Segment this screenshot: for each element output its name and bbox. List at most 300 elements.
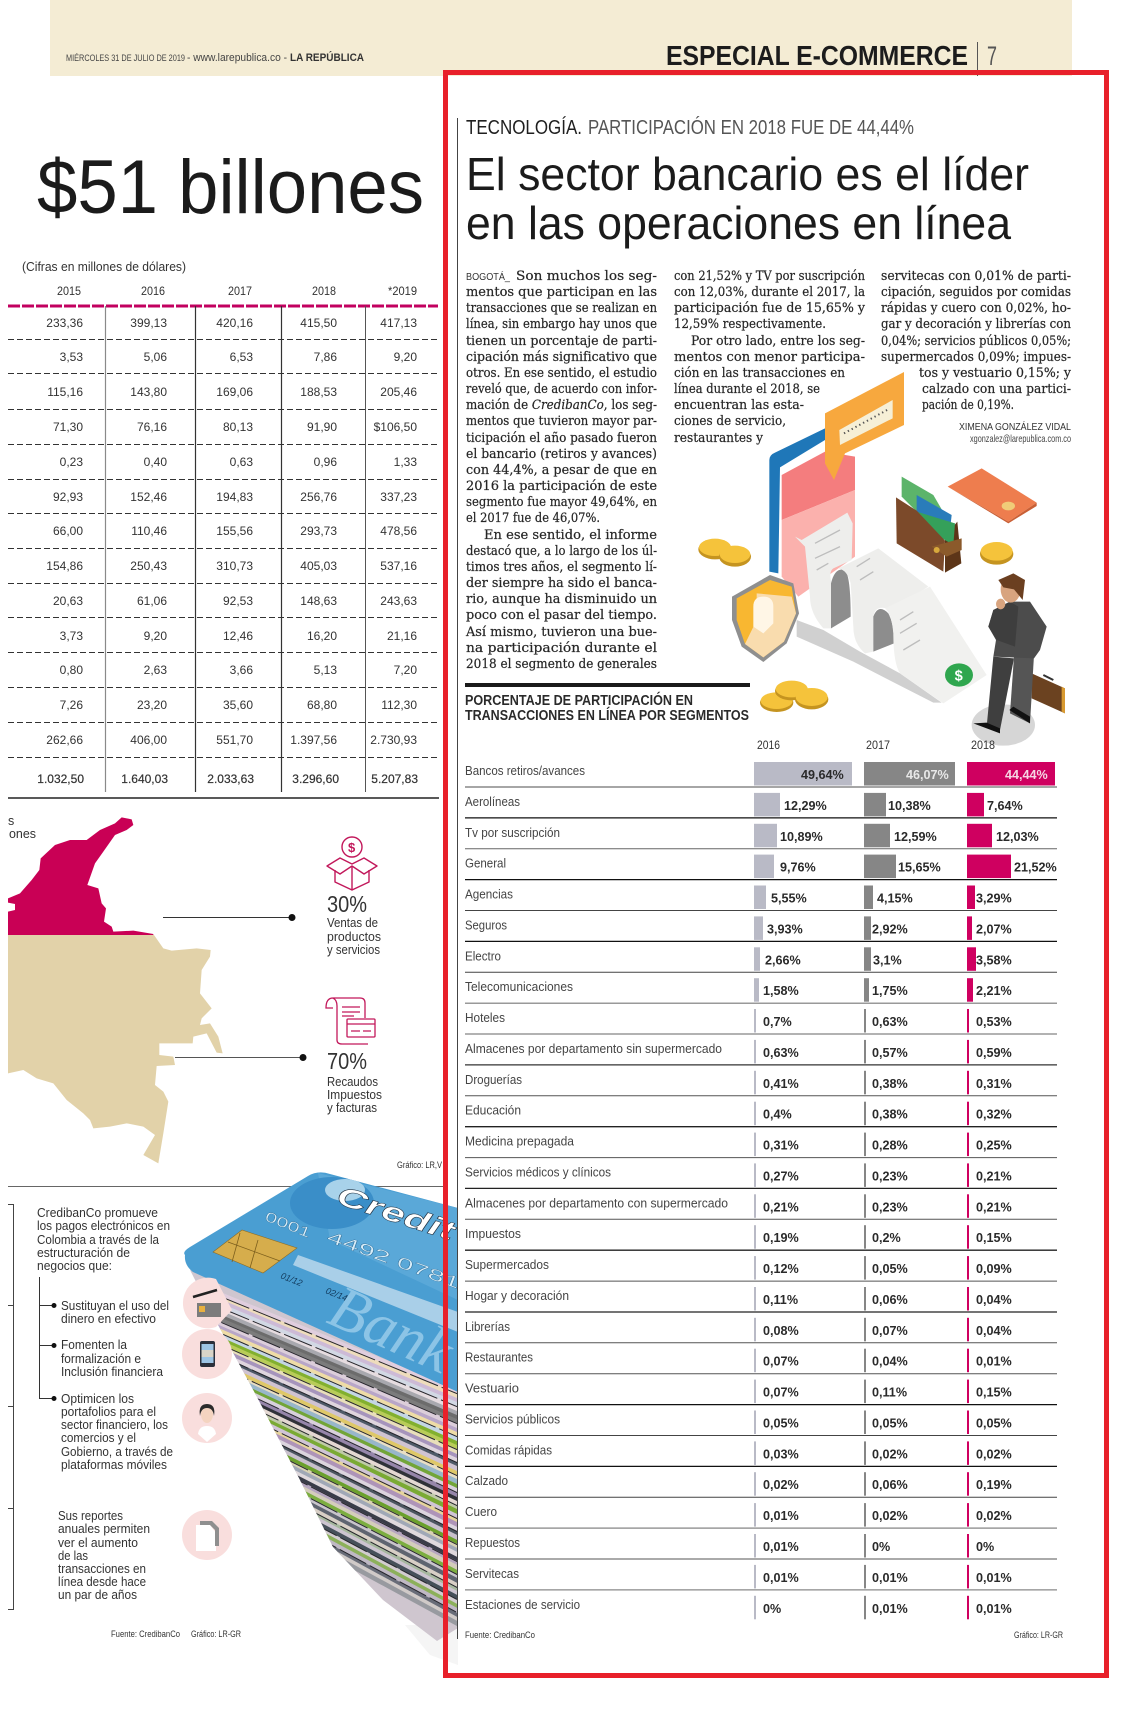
article column 1: Así mismo, tuvieron una bue-: [465, 625, 657, 640]
bullet: fomenten: Fomenten la: [61, 1338, 127, 1352]
row: Comidas rápidas: 0,02%: [976, 1447, 1012, 1461]
row: Almacenes sin supermercado: 0,63%: [763, 1046, 799, 1060]
text: annual reports: anuales permiten: [58, 1522, 150, 1536]
row: Medicina prepagada: 0,31%: [763, 1139, 799, 1153]
table values: 0,23: [60, 455, 83, 469]
stat: 30% sales: y servicios: [327, 943, 380, 957]
bottom-left intro text: los pagos electrónicos en: [37, 1219, 170, 1233]
table values: 21,16: [387, 629, 417, 643]
row: Droguerías: 0,38%: [872, 1077, 908, 1091]
row: Electro: 3,1%: [873, 953, 902, 967]
row: Servicios públicos: Servicios públicos: [465, 1412, 560, 1426]
table values: 112,30: [381, 698, 417, 712]
table values: 20,63: [53, 594, 83, 608]
connector: 30%: [163, 914, 296, 921]
table values: 262,66: [46, 733, 83, 747]
page header band: [50, 0, 1072, 76]
row: Repuestos: 0,01%: [763, 1540, 799, 1554]
row: Impuestos: 0,2%: [872, 1231, 901, 1245]
row: Electro: Electro: [465, 948, 501, 963]
row: Medicina prepagada: 0,25%: [976, 1139, 1012, 1153]
table values: 551,70: [216, 733, 253, 747]
table values: 205,46: [380, 385, 417, 399]
page header band: MIÉRCOLES 31 DE JULIO DE 2019: [66, 53, 185, 63]
table values: 417,13: [380, 316, 417, 330]
chart year headers: [757, 738, 995, 752]
row: Servicios médicos y clínicos: 0,27%: [763, 1169, 799, 1183]
row: Hogar y decoración: Hogar y decoración: [465, 1288, 569, 1303]
bullet: optimicen: [61, 1392, 173, 1472]
stat: 70% collections: 70%: [327, 1048, 367, 1074]
coins left: [698, 539, 751, 567]
row: Impuestos: Impuestos: [465, 1226, 521, 1241]
table values: 399,13: [130, 316, 167, 330]
table year headers: 2015: [57, 284, 81, 298]
article column 3: pación de 0,19%.: [922, 398, 1014, 413]
bullet: optimicen: plataformas móviles: [61, 1458, 167, 1472]
map lower region 70%: [8, 935, 223, 1163]
text: annual reports: ver el aumento: [58, 1536, 138, 1550]
row: Restaurantes: 0,07%: [763, 1355, 799, 1369]
article column 1: [465, 269, 658, 672]
map graphic credit: Gráfico: LR,V: [397, 1160, 442, 1170]
row: General: [465, 855, 1057, 880]
row: Cuero: Cuero: [465, 1504, 497, 1519]
bullet: optimicen: Gobierno, a través de: [61, 1445, 173, 1459]
table values: 415,50: [300, 316, 337, 330]
row: Agencias: Agencias: [465, 886, 513, 902]
row: Educación: Educación: [465, 1103, 521, 1118]
stack edge stripes: [180, 1260, 460, 1650]
article column 3: [881, 269, 1072, 413]
article column 1: 2016 la participación de este: [466, 479, 657, 494]
row: Calzado: Calzado: [465, 1473, 508, 1488]
row: Librerías: Librerías: [465, 1319, 510, 1334]
chart year headers: 2017: [866, 738, 890, 752]
table values: 243,63: [380, 594, 417, 608]
table values: 12,46: [223, 629, 253, 643]
row: Almacenes con supermercado: 0,23%: [872, 1200, 908, 1214]
article column 1: En ese sentido, el informe: [484, 528, 657, 543]
row: Almacenes con supermercado: Almacenes por departamento con supermercado: [465, 1195, 728, 1210]
row: Librerías: 0,04%: [976, 1324, 1012, 1338]
row: Servitecas: Servitecas: [465, 1566, 519, 1581]
fine dark card edges: [221, 1298, 457, 1612]
table values: 92,93: [53, 490, 83, 504]
row: Electro: 2,66%: [765, 953, 801, 967]
man in suit: [973, 573, 1047, 733]
row: Bancos: 49,64%: [801, 768, 844, 782]
chart year headers: 2016: [757, 738, 780, 752]
green dollar badge: $: [955, 669, 963, 685]
row: Aerolíneas: 7,64%: [987, 799, 1023, 813]
row: Impuestos: [465, 1225, 1057, 1250]
bottom-left intro text: [37, 1206, 170, 1273]
row: Servitecas: [465, 1565, 1057, 1590]
icon: person in circle: [182, 1393, 232, 1443]
row: Bancos: 46,07%: [906, 768, 949, 782]
row: Vestuario: 0,07%: [763, 1386, 799, 1400]
icon: open box with coin: $: [348, 840, 356, 855]
row: Electro: 3,58%: [976, 953, 1012, 967]
article column 1: cipación más significativo que: [466, 350, 657, 365]
icon: card in circle: [183, 1278, 232, 1328]
row: Bancos: 44,44%: [1005, 768, 1048, 782]
article column 1: timos tres años, el segmento lí-: [466, 560, 657, 575]
bottom-left intro text: estructuración de: [37, 1246, 130, 1260]
chart source line: Gráfico: LR-GR: [1014, 1630, 1063, 1640]
row: Calzado: 0,02%: [763, 1478, 799, 1492]
article column 2: ción en las transacciones en: [674, 366, 846, 381]
row: Almacenes con supermercado: 0,21%: [976, 1200, 1012, 1214]
table values: 152,46: [130, 490, 167, 504]
coins lower: [760, 681, 828, 712]
row: Restaurantes: 0,04%: [872, 1355, 908, 1369]
table values: 337,23: [380, 490, 417, 504]
orange credit card: [948, 468, 1037, 523]
row: Servicios públicos: 0,05%: [872, 1416, 908, 1430]
left source line: Fuente: CredibanCo: [111, 1629, 180, 1639]
chart title: PORCENTAJE DE PARTICIPACIÓN EN: [465, 691, 693, 709]
table values: 66,00: [53, 524, 83, 538]
row: Estaciones de servicio: 0%: [763, 1602, 781, 1616]
table values: 115,16: [47, 385, 83, 399]
table values: 233,36: [46, 316, 83, 330]
map cropped label: [8, 814, 36, 841]
table values: 3,66: [230, 663, 253, 677]
row: Estaciones de servicio: 0,01%: [872, 1602, 908, 1616]
table values: 35,60: [223, 698, 253, 712]
article column 2: restaurantes y: [674, 431, 764, 446]
table values: 5.207,83: [371, 772, 418, 786]
table values: 23,20: [137, 698, 167, 712]
table values: 143,80: [130, 385, 167, 399]
bar chart: participation by segment: [465, 762, 1057, 1619]
bullet: fomenten: Inclusión financiera: [61, 1365, 163, 1379]
row: Vestuario: Vestuario: [465, 1381, 519, 1396]
row: Agencias: [465, 886, 1057, 910]
row: Supermercados: 0,12%: [763, 1262, 799, 1276]
article column 1: línea, sin embargo hay unos que: [466, 317, 657, 332]
byline: xgonzalez@larepublica.com.co: [970, 433, 1071, 445]
article column 3: rápidas y cuero con 0,02%, ho-: [881, 301, 1071, 316]
table values: 420,16: [216, 316, 253, 330]
page header band: LA REPÚBLICA: [290, 51, 364, 64]
row: Almacenes sin supermercado: Almacenes por departamento sin supermercado: [465, 1041, 722, 1056]
card chip: [213, 1230, 297, 1273]
article column 1: poco con el pasar del tiempo.: [466, 608, 657, 623]
row: Seguros: Seguros: [465, 917, 507, 932]
green dollar badge: [945, 663, 973, 687]
row: Servicios médicos y clínicos: 0,23%: [872, 1169, 908, 1183]
table values: 405,03: [300, 559, 337, 573]
table year headers: *2019: [388, 284, 417, 298]
article column 2: con 12,03%, durante el 2017, la: [674, 285, 865, 300]
article column 1: otros. En ese sentido, el estudio: [466, 366, 657, 381]
article column 2: 12,59% respectivamente.: [674, 317, 826, 332]
row: Tv por suscripción: 12,03%: [996, 830, 1039, 844]
article column 1: segmento fue mayor 49,64%, en: [466, 495, 658, 510]
left bracket with ticks: [8, 1204, 14, 1610]
row: Vestuario: 0,11%: [872, 1386, 907, 1400]
article column 1: reveló que, de acuerdo con infor-: [466, 382, 657, 397]
row: Educación: 0,32%: [976, 1108, 1012, 1122]
map of Colombia split 30/70: [8, 814, 223, 1163]
table values: 5,06: [144, 350, 167, 364]
article column 2: línea durante el 2018, se: [674, 382, 820, 397]
row: Restaurantes: Restaurantes: [465, 1350, 533, 1365]
table values: 537,16: [380, 559, 417, 573]
row: Droguerías: Droguerías: [465, 1072, 522, 1087]
byline: [959, 420, 1071, 445]
table year headers: 2018: [312, 284, 336, 298]
row: Telecomunicaciones: Telecomunicaciones: [465, 979, 573, 994]
table values: 71,30: [53, 420, 83, 434]
row: Servicios médicos y clínicos: Servicios médicos y clínicos: [465, 1164, 611, 1179]
article column 3: tos y vestuario 0,15%; y: [919, 366, 1072, 381]
table year headers: 2017: [228, 284, 252, 298]
table year headers: 2016: [141, 284, 165, 298]
table values: 7,86: [314, 350, 337, 364]
row: Servicios médicos y clínicos: [465, 1163, 1057, 1188]
top card: [180, 1165, 465, 1395]
article column 1: el bancario (retiros y avances): [466, 447, 657, 462]
row: Agencias: 3,29%: [976, 892, 1012, 906]
article column 2: participación fue de 15,65% y: [674, 301, 866, 316]
table values: 110,46: [131, 524, 167, 538]
text: annual reports: [58, 1509, 150, 1602]
stat: 30% sales: [327, 891, 381, 957]
kicker: [466, 116, 914, 139]
table values: 256,76: [300, 490, 337, 504]
row: Telecomunicaciones: [465, 978, 1057, 1003]
table values: 2.033,63: [207, 772, 254, 786]
title: [466, 148, 1029, 249]
row: Comidas rápidas: 0,02%: [872, 1447, 908, 1461]
article column 3: gar y decoración y librerías con: [881, 317, 1072, 332]
bullet: sustituyan: dinero en efectivo: [61, 1312, 156, 1326]
stat: 70% collections: Impuestos: [327, 1088, 382, 1102]
icon: document in circle: [182, 1510, 232, 1560]
page header band: - www.larepublica.co -: [187, 52, 287, 64]
bullet: optimicen: comercios y el: [61, 1431, 136, 1445]
row: Hoteles: Hoteles: [465, 1010, 505, 1025]
briefcase: [1032, 673, 1065, 713]
row: Tv por suscripción: 12,59%: [894, 830, 937, 844]
table values: 250,43: [130, 559, 167, 573]
table values: 2.730,93: [370, 733, 417, 747]
text: annual reports: un par de años: [58, 1588, 137, 1602]
page header band: ESPECIAL E-COMMERCE: [666, 40, 968, 71]
man's ground shadow: [972, 704, 1035, 746]
stat: 30% sales: Ventas de: [327, 916, 378, 930]
table values: 1,33: [394, 455, 417, 469]
row: Repuestos: 0%: [872, 1540, 890, 1554]
photo: stack of credit cards: [180, 1165, 465, 1665]
row: Supermercados: 0,09%: [976, 1262, 1012, 1276]
bullet: sustituyan: Sustituyan el uso del: [61, 1299, 169, 1313]
row: Tv por suscripción: 10,89%: [780, 830, 823, 844]
row: Calzado: 0,19%: [976, 1478, 1012, 1492]
row: Hoteles: 0,7%: [763, 1015, 792, 1029]
row: Aerolíneas: Aerolíneas: [465, 794, 520, 809]
phone screen: [782, 452, 855, 597]
icon: open box with coin: [327, 837, 377, 890]
table values: 406,00: [130, 733, 167, 747]
row: Comidas rápidas: 0,03%: [763, 1447, 799, 1461]
row: Estaciones de servicio: Estaciones de servicio: [465, 1597, 580, 1612]
article column 1: na participación durante el: [466, 641, 657, 656]
article column 1: el 2017 fue de 46,07%.: [466, 511, 600, 526]
table values: 293,73: [300, 524, 337, 538]
table year headers: [57, 284, 417, 298]
card text: Credit: [333, 1180, 460, 1247]
row: Hoteles: 0,63%: [872, 1015, 908, 1029]
row: Telecomunicaciones: 1,58%: [763, 984, 799, 998]
row: Almacenes con supermercado: 0,21%: [763, 1200, 799, 1214]
stat: 30% sales: 30%: [327, 891, 367, 917]
table values: 0,96: [314, 455, 337, 469]
article column 2: con 21,52% y TV por suscripción: [674, 269, 866, 284]
row: Seguros: 3,93%: [767, 922, 803, 936]
row: Aerolíneas: 12,29%: [784, 799, 827, 813]
row: General: 15,65%: [898, 861, 941, 875]
article column 2: [674, 269, 866, 446]
article column 1: mentos que participan en las: [466, 285, 657, 300]
left source line: Gráfico: LR-GR: [191, 1629, 241, 1639]
stat: 70% collections: Recaudos: [327, 1075, 378, 1089]
connector: 70%: [175, 1054, 306, 1061]
kicker: TECNOLOGÍA.: [466, 116, 582, 139]
row: Seguros: [465, 916, 1057, 941]
phone frame: [769, 428, 825, 573]
bullet: sustituyan: [61, 1299, 169, 1326]
left headline: $51 billones: $51 billones: [37, 145, 424, 230]
table values: 0,40: [144, 455, 167, 469]
table values: [37, 316, 418, 786]
top card: 01/12: [279, 1271, 304, 1288]
tree connector with bullets: [40, 1277, 56, 1401]
row: Tv por suscripción: [465, 824, 1057, 849]
text: annual reports: línea desde hace: [58, 1575, 146, 1589]
left table of yearly figures: [8, 260, 439, 798]
table values: 194,83: [216, 490, 253, 504]
table values: 9,20: [144, 629, 167, 643]
row: Supermercados: [465, 1256, 1057, 1281]
illustration: mobile payments: [698, 372, 1065, 746]
row: Tv por suscripción: Tv por suscripción: [465, 825, 560, 840]
table values: 3.296,60: [292, 772, 339, 786]
row: Calzado: 0,06%: [872, 1478, 908, 1492]
table values: 1.032,50: [37, 772, 84, 786]
chart source line: [465, 1630, 1063, 1640]
row: Aerolíneas: [465, 793, 1057, 818]
chart title rule: [465, 683, 750, 687]
article column 1: Son muchos los seg-: [516, 269, 657, 284]
text: annual reports: transacciones en: [58, 1562, 146, 1576]
row: Servicios médicos y clínicos: 0,21%: [976, 1169, 1012, 1183]
table values: 7,20: [394, 663, 417, 677]
table values: 6,53: [230, 350, 253, 364]
article column 1: destacó que, a lo largo de los úl-: [466, 544, 657, 559]
bullet: fomenten: [61, 1338, 163, 1379]
left source line: [111, 1629, 241, 1639]
bottom-left intro text: CredibanCo promueve: [37, 1206, 158, 1220]
row: Librerías: 0,08%: [763, 1324, 799, 1338]
text: annual reports: de las: [58, 1549, 88, 1563]
article column 1: rio, aunque ha disminuido un: [466, 592, 658, 607]
row: Vestuario: 0,15%: [976, 1386, 1012, 1400]
title: El sector bancario es el líder: [466, 148, 1029, 200]
table values: 61,06: [137, 594, 167, 608]
table values: 188,53: [300, 385, 337, 399]
article column 1: 2018 el segmento de generales: [466, 657, 657, 672]
table values: 7,26: [60, 698, 83, 712]
table values: 3,53: [60, 350, 83, 364]
stat: 30% sales: productos: [327, 930, 381, 944]
article column 3: supermercados 0,09%; impues-: [881, 350, 1071, 365]
row: Medicina prepagada: Medicina prepagada: [465, 1134, 575, 1149]
row: General: General: [465, 856, 506, 871]
row: Supermercados: 0,05%: [872, 1262, 908, 1276]
wallet: [896, 477, 962, 573]
row: Servicios públicos: 0,05%: [976, 1416, 1012, 1430]
article column 1: transacciones que se realizan en: [466, 301, 658, 316]
chart title: TRANSACCIONES EN LÍNEA POR SEGMENTOS: [465, 707, 749, 724]
bullet: optimicen: sector financiero, los: [61, 1418, 168, 1432]
bullet: optimicen: Optimicen los: [61, 1392, 134, 1406]
row: Bancos: [465, 762, 1057, 787]
table values: 310,73: [216, 559, 253, 573]
stat: 70% collections: [327, 1048, 382, 1115]
stat: 70% collections: y facturas: [327, 1101, 377, 1115]
row: Droguerías: [465, 1071, 1057, 1096]
row: Seguros: 2,92%: [872, 922, 908, 936]
row: Cuero: [465, 1503, 1057, 1528]
row: Vestuario: [465, 1380, 1057, 1405]
article column 1: mentos que tuvieron mayor par-: [466, 414, 657, 429]
table values: 2,63: [144, 663, 167, 677]
page header band: 7: [987, 41, 997, 71]
article column 2: ciones de servicio,: [674, 414, 786, 429]
table values: 9,20: [394, 350, 417, 364]
row: Telecomunicaciones: 1,75%: [872, 984, 908, 998]
icon: phone in circle: [182, 1329, 232, 1379]
article column 3: servitecas con 0,01% de parti-: [881, 269, 1071, 284]
row: Librerías: [465, 1318, 1057, 1343]
row: Hoteles: [465, 1009, 1057, 1034]
article column 3: calzado con una partici-: [922, 382, 1071, 397]
article column 2: Por otro lado, entre los seg-: [691, 334, 865, 349]
row: Repuestos: 0%: [976, 1540, 994, 1554]
article column 2: encuentran las esta-: [674, 398, 804, 413]
table caption: (Cifras en millones de dólares): [22, 260, 186, 274]
row: Aerolíneas: 10,38%: [888, 799, 931, 813]
row: Servicios públicos: [465, 1410, 1057, 1436]
receipt ribbon: [795, 513, 987, 703]
row: Almacenes sin supermercado: [465, 1040, 1057, 1065]
table values: 155,56: [216, 524, 253, 538]
row: Servitecas: 0,01%: [976, 1571, 1012, 1585]
row: Bancos: Bancos retiros/avances: [465, 763, 585, 778]
security shield: [732, 575, 799, 662]
text: annual reports: Sus reportes: [58, 1509, 123, 1523]
table values: 92,53: [223, 594, 253, 608]
row: General: 21,52%: [1014, 861, 1057, 875]
shadow of receipt: [797, 620, 942, 703]
row: Impuestos: 0,15%: [976, 1231, 1012, 1245]
row: Servicios públicos: 0,05%: [763, 1416, 799, 1430]
